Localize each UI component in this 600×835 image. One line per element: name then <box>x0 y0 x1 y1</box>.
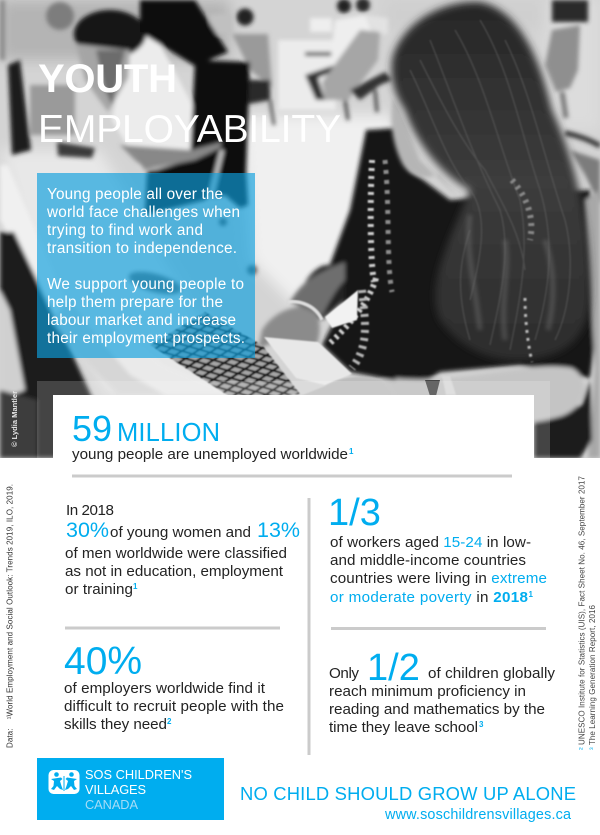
stat: 1/2 of children: time they leave school <box>329 719 478 736</box>
stat: 1/3 of workers: or moderate poverty in 2018 <box>330 589 528 606</box>
stat: 30% and 13%: 1 <box>133 582 138 591</box>
data sources right <box>578 475 597 750</box>
organisation name <box>85 767 192 812</box>
intro panel <box>37 173 255 358</box>
title: EMPLOYABILITY <box>38 108 341 151</box>
data source left: Data: ¹World Employment and Social Outlook: Trends 2019, ILO, 2019. <box>6 484 14 748</box>
stat: 40% of employers: of employers worldwide find it <box>64 680 266 697</box>
intro text: transition to independence. <box>47 240 237 257</box>
stat: 1/2 of children <box>329 647 555 736</box>
intro text: Young people all over the <box>47 186 223 203</box>
title: YOUTH <box>38 57 177 101</box>
stat: 1/3 of workers: of workers aged 15-24 in low- <box>330 534 531 551</box>
stat: 30% and 13% <box>65 502 300 598</box>
stat: 1/3 of workers: 1/3 <box>328 492 381 534</box>
tagline: NO CHILD SHOULD GROW UP ALONE <box>240 783 576 804</box>
intro text: labour market and increase <box>47 312 236 329</box>
stat: 40% of employers: 2 <box>167 717 172 726</box>
icon: SOS children logo <box>48 770 80 794</box>
divider <box>331 627 546 630</box>
divider <box>65 626 280 630</box>
left seated woman <box>112 32 195 172</box>
data sources right: ² UNESCO Institute for Statistics (UIS), Fact Sheet No. 46, September 2017 <box>578 475 586 750</box>
hair <box>392 2 590 361</box>
left monitors and desk <box>8 60 31 155</box>
stat: 30% and 13%: In 2018 <box>66 502 114 519</box>
vertical divider <box>308 498 310 755</box>
stat: 1/3 of workers: countries were living in extreme <box>330 570 547 587</box>
stat: 59 million: MILLION <box>117 419 220 447</box>
white stat panel <box>53 395 534 458</box>
title <box>38 57 341 151</box>
stat: 1/3 of workers <box>328 492 547 606</box>
stat: 30% and 13%: of young women and <box>110 524 251 541</box>
stat: 40% of employers <box>64 640 284 733</box>
stat: 40% of employers: difficult to recruit people with the <box>64 698 284 715</box>
stat: 59 million: young people are unemployed worldwide <box>72 446 348 463</box>
background people and furniture <box>0 0 600 458</box>
stat: 1/3 of workers: and middle-income countries <box>330 552 526 569</box>
stat: 30% and 13%: 30% <box>66 518 109 542</box>
right corner <box>585 190 600 458</box>
organisation name: CANADA <box>85 797 138 812</box>
stat: 1/2 of children: reach minimum proficiency in <box>329 683 526 700</box>
woman's jacket and body <box>258 128 600 458</box>
stat: 1/2 of children: 3 <box>479 720 484 729</box>
intro text: world face challenges when <box>46 204 240 221</box>
logo panel <box>37 758 224 820</box>
stat: 30% and 13%: of men worldwide were classified <box>65 545 287 562</box>
stat: 30% and 13%: or training <box>65 581 133 598</box>
patterned scarf <box>328 160 532 368</box>
stat: 1/3 of workers: 1 <box>528 590 534 599</box>
intro text <box>46 186 245 347</box>
stat: 1/2 of children: 1/2 <box>367 647 420 689</box>
stat: 40% of employers: 40% <box>64 640 142 683</box>
stat: 1/2 of children: Only <box>329 665 359 682</box>
stat: 59 million: 1 <box>349 447 354 456</box>
face <box>389 100 448 188</box>
intro text: help them prepare for the <box>47 294 223 311</box>
organisation name: VILLAGES <box>85 782 146 797</box>
website: www.soschildrensvillages.ca <box>384 807 571 823</box>
soft room tones <box>2 0 392 392</box>
divider <box>72 474 512 478</box>
stat: 59 million: 59 <box>72 408 112 449</box>
arm and hand <box>258 306 320 356</box>
stat: 59 million <box>72 408 354 463</box>
stat: 1/2 of children: of children globally <box>428 665 555 682</box>
intro text: trying to find work and <box>47 222 203 239</box>
stat: 40% of employers: skills they need <box>64 716 167 733</box>
intro text: their employment prospects. <box>47 330 245 347</box>
organisation name: SOS CHILDREN'S <box>85 767 192 782</box>
intro text: We support young people to <box>47 276 244 293</box>
stat: 30% and 13%: as not in education, employment <box>65 563 284 580</box>
background photo: young woman working at a computer <box>0 0 600 458</box>
paper, hand and keyboard <box>150 290 456 400</box>
translucent band behind headline stat <box>37 381 550 458</box>
stat: 1/2 of children: reading and mathematics by the <box>329 701 545 718</box>
photo credit: © Lydia Mantler <box>10 391 19 447</box>
stat: 30% and 13%: 13% <box>257 518 300 542</box>
data sources right: ³ The Learning Generation Report, 2016 <box>588 604 597 750</box>
